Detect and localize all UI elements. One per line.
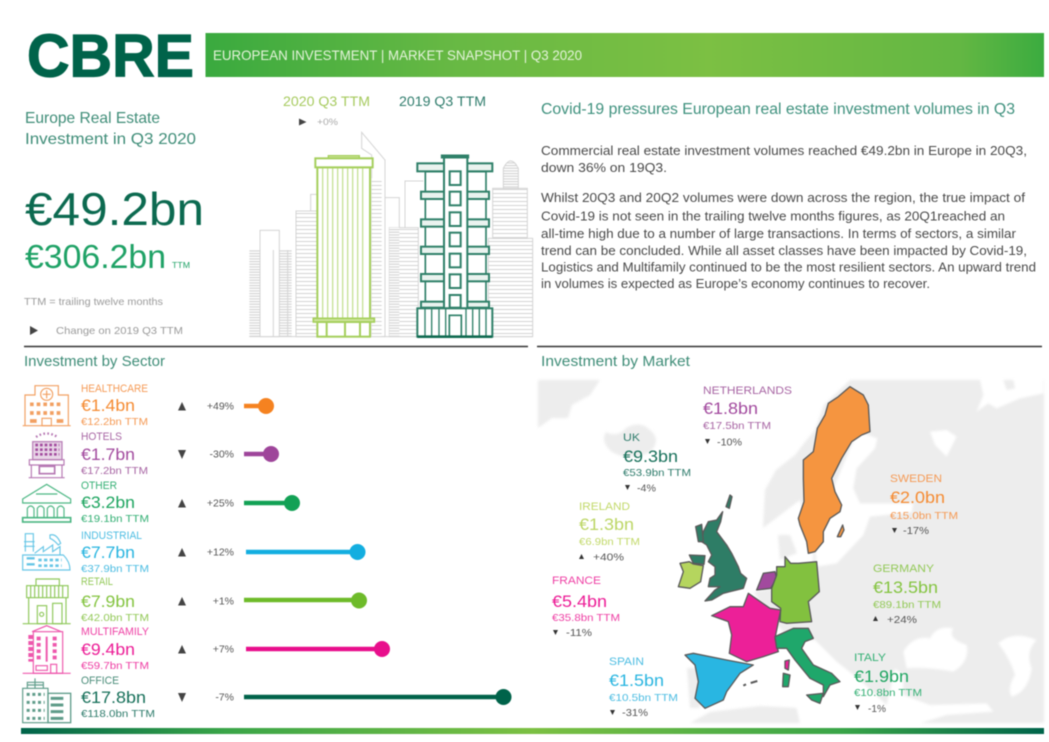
text block: second paragraph: Logistics and Multifamily continued to be the most resilient sectors. An upward trend <box>541 260 1036 274</box>
market label: Italy: €10.8bn TTM <box>854 687 922 699</box>
text block: second paragraph: Whilst 20Q3 and 20Q2 volumes were down across the region, the true impact of <box>541 191 1026 205</box>
sector row: Multifamily: €59.7bn TTM <box>81 660 149 672</box>
sector row: Healthcare: HEALTHCARE <box>81 383 148 395</box>
country: France <box>712 593 789 670</box>
sector row: Office: -7% <box>215 692 234 704</box>
market label: Germany: €89.1bn TTM <box>873 599 941 611</box>
icon: healthcare building <box>23 386 71 426</box>
sector row: Hotels: €1.7bn <box>81 445 135 464</box>
market label: Germany <box>873 563 941 626</box>
sector row: Industrial: +12% <box>207 546 234 558</box>
text block: second paragraph: in volumes is expected as Europe’s economy continues to recover. <box>541 277 930 291</box>
background skyline <box>249 132 533 337</box>
market label: Sweden: SWEDEN <box>890 473 942 485</box>
market label: Ireland: €6.9bn TTM <box>579 536 640 548</box>
market label: Italy: ITALY <box>854 652 887 664</box>
sector row: Healthcare: +49% <box>207 400 234 412</box>
heading: Investment by Market: Investment by Market <box>541 353 691 370</box>
sector row: Retail <box>23 576 367 624</box>
lollipop: Other <box>244 495 300 511</box>
text block: second paragraph: trend can be concluded. While all asset classes have been impacted by Covid-19, <box>541 244 1027 258</box>
heading: Europe Real Estate Investment <box>25 110 196 148</box>
market label: Spain: €10.5bn TTM <box>609 692 678 704</box>
sector row: Other: €3.2bn <box>81 493 135 512</box>
legend: building comparison: 2020 Q3 TTM <box>283 94 370 109</box>
sector row: Hotels: HOTELS <box>81 431 122 443</box>
lollipop: Office <box>244 689 512 705</box>
lollipop: Healthcare <box>244 398 274 414</box>
lollipop: Industrial <box>246 544 366 560</box>
sector row: Other: €19.1bn TTM <box>81 513 149 525</box>
sector row: Multifamily: MULTIFAMILY <box>81 626 150 638</box>
lollipop: Multifamily <box>246 641 390 657</box>
lollipop: Hotels <box>244 446 279 462</box>
market label: Ireland: €1.3bn <box>579 515 634 534</box>
market label: Ireland <box>579 501 640 564</box>
market label: Sweden: €2.0bn <box>890 488 945 507</box>
country: Germany <box>772 557 819 623</box>
legend: building comparison: +0% <box>317 117 339 128</box>
sector row: Healthcare: €1.4bn <box>81 396 135 415</box>
market label: Germany: €13.5bn <box>873 578 938 597</box>
legend: building comparison: 2019 Q3 TTM <box>399 94 486 109</box>
heading: commentary: Covid-19 pressures European real estate investment volumes in Q3 <box>541 101 1015 118</box>
figure: quarterly volume: €49.2bn <box>25 183 204 235</box>
sector row: Other <box>23 480 300 525</box>
market label: UK <box>623 432 691 494</box>
lollipop: Retail <box>244 592 367 608</box>
illustration: skyline with comparison buildings <box>249 132 533 337</box>
map seas <box>790 380 1043 723</box>
market label: Italy: €1.9bn <box>854 667 909 686</box>
sector row: Hotels: €17.2bn TTM <box>81 465 148 477</box>
text block: second paragraph: all-time high due to a number of large transactions. In terms of sectors, a similar <box>541 227 1016 241</box>
icon: institution <box>23 484 71 522</box>
country: Spain <box>685 653 757 708</box>
figure: TTM volume: €306.2bn <box>25 238 166 275</box>
footer bar <box>21 728 1044 734</box>
market label: Sweden: €15.0bn TTM <box>890 510 958 522</box>
text block: first paragraph <box>541 144 1027 175</box>
market label: UK: €53.9bn TTM <box>623 467 691 479</box>
market label: Netherlands: €17.5bn TTM <box>703 420 771 432</box>
country: Netherlands <box>757 572 777 590</box>
map base land <box>538 380 1044 723</box>
sector row: Hotels <box>29 431 279 478</box>
market label: Spain: -31% <box>622 707 648 719</box>
sector row: Other: OTHER <box>81 480 117 492</box>
header banner <box>206 33 1044 77</box>
sector row: Office: €118.0bn TTM <box>81 708 155 720</box>
sector row: Healthcare <box>23 383 274 428</box>
market label: Germany: GERMANY <box>873 563 935 575</box>
panel: commentary <box>541 101 1036 291</box>
icon: office block <box>23 678 71 723</box>
icon: apartment block <box>23 626 71 673</box>
logo: CBRE: CBRE <box>27 22 194 90</box>
figure: TTM volume: TTM <box>172 261 190 270</box>
heading: Europe Real Estate Investment: Investment in Q3 2020 <box>25 131 196 148</box>
text block: first paragraph: down 36% on 19Q3. <box>541 161 667 175</box>
sector row: Retail: +1% <box>213 596 234 608</box>
sector row: Hotels: -30% <box>209 448 234 460</box>
sector row: Office: OFFICE <box>81 675 119 687</box>
market label: France: -11% <box>566 627 592 639</box>
market label: UK: €9.3bn <box>623 447 678 466</box>
sector row: Industrial: INDUSTRIAL <box>81 530 142 542</box>
panel: headline figures <box>24 110 204 337</box>
market label: France <box>552 575 620 639</box>
market label: Germany: +24% <box>887 614 917 626</box>
text block: second paragraph <box>541 191 1036 291</box>
country: UK <box>689 495 747 601</box>
market label: Sweden: -17% <box>903 525 929 537</box>
sector row: Office <box>23 675 511 723</box>
sector row: Industrial <box>23 530 365 575</box>
sector row: Industrial: €37.9bn TTM <box>81 563 149 575</box>
sector row: Multifamily: €9.4bn <box>81 640 135 659</box>
heading: Investment by Sector: Investment by Sector <box>24 353 165 370</box>
header banner: EUROPEAN INVESTMENT | MARKET SNAPSHOT | Q3 2020 <box>213 47 582 63</box>
market label: France: €5.4bn <box>552 592 607 611</box>
market label: Ireland: IRELAND <box>579 501 630 513</box>
market label: France: FRANCE <box>552 575 601 587</box>
country: Italy <box>775 628 840 703</box>
heading: Europe Real Estate Investment: Europe Real Estate <box>25 110 160 127</box>
market label: Netherlands: -10% <box>717 436 742 448</box>
panel: sector chart <box>23 383 511 723</box>
market label: Spain <box>609 656 678 719</box>
icon: shop <box>23 579 71 624</box>
sector row: Retail: €7.9bn <box>81 592 135 611</box>
sector row: Healthcare: €12.2bn TTM <box>81 416 148 428</box>
legend: building comparison <box>283 94 486 128</box>
map: Europe <box>538 380 1044 723</box>
market label: Netherlands <box>703 385 792 448</box>
market label: UK: UK <box>623 432 641 444</box>
building: 2019 Q3 TTM <box>417 155 492 337</box>
market label: Spain: SPAIN <box>609 656 644 668</box>
sector row: Multifamily: +7% <box>213 644 234 656</box>
sector row: Multifamily <box>23 626 390 673</box>
icon: hotel <box>29 433 65 478</box>
country: Ireland <box>678 562 703 588</box>
market label: Sweden <box>890 473 958 537</box>
sector row: Retail: €42.0bn TTM <box>81 612 149 624</box>
text block: second paragraph: Covid-19 is not seen in the trailing twelve months figures, as 20Q1reached an <box>541 210 1005 224</box>
market label: Netherlands: NETHERLANDS <box>703 385 792 397</box>
building: 2020 Q3 TTM <box>313 156 374 337</box>
sector row: Retail: RETAIL <box>81 576 113 588</box>
map backdrop: land and seas <box>538 380 1044 723</box>
market label: Italy: -1% <box>868 703 886 715</box>
note: TTM definition: TTM = trailing twelve months <box>24 296 163 308</box>
market label: Spain: €1.5bn <box>609 671 664 690</box>
market label: Ireland: +40% <box>593 552 624 564</box>
market label: UK: -4% <box>637 482 656 494</box>
icon: factory <box>23 534 70 570</box>
text block: first paragraph: Commercial real estate investment volumes reached €49.2bn in Europe in 20Q3, <box>541 144 1027 158</box>
sector row: Other: +25% <box>207 498 234 510</box>
sector row: Office: €17.8bn <box>81 688 146 707</box>
country: Sweden <box>798 387 870 553</box>
sector row: Industrial: €7.7bn <box>81 543 135 562</box>
market label: Netherlands: €1.8bn <box>703 399 758 418</box>
legend: change indicator: Change on 2019 Q3 TTM <box>56 325 183 337</box>
market label: Italy <box>854 652 922 715</box>
market label: France: €35.8bn TTM <box>552 612 620 624</box>
